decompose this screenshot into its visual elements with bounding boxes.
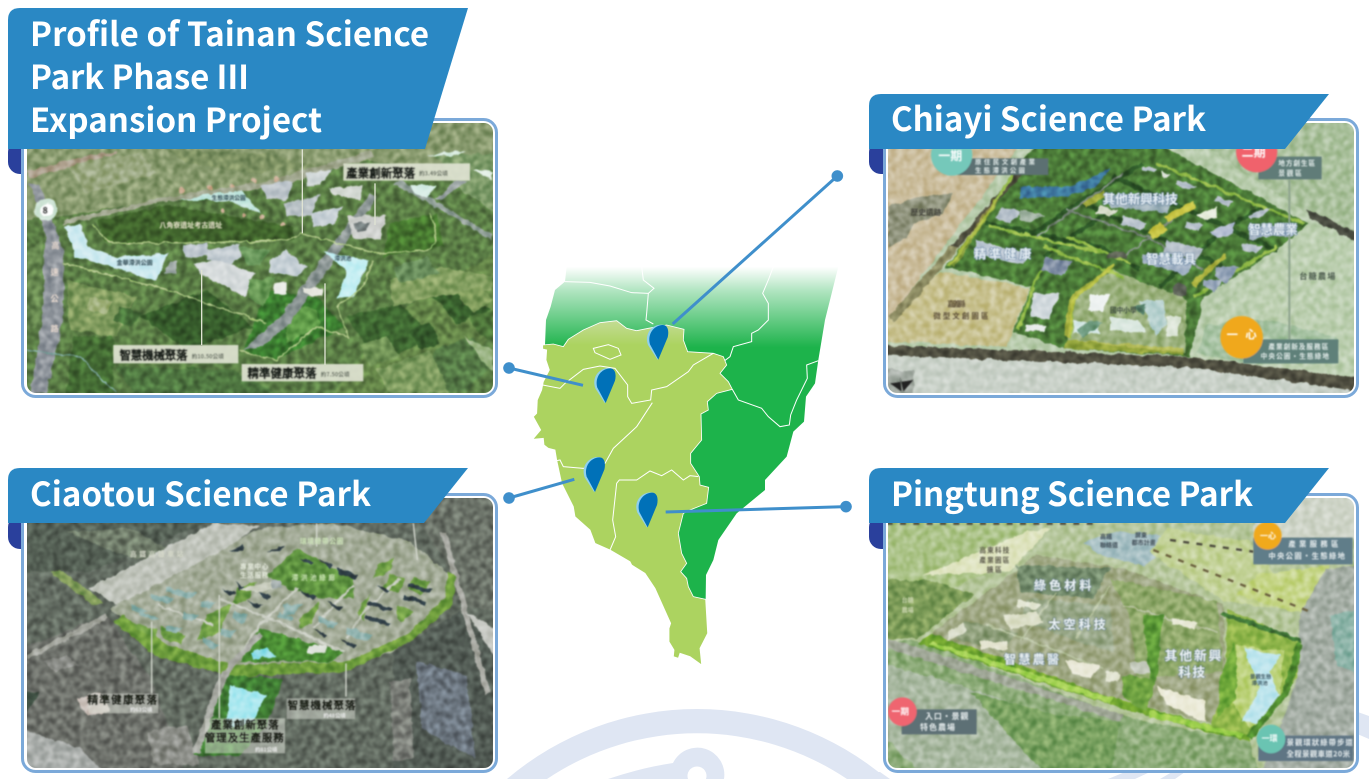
- district labels: 全程景觀車道20米: [1287, 749, 1351, 760]
- heading: Ciaotou Science Park: [8, 468, 468, 523]
- connector: Ciaotou: [503, 479, 574, 504]
- cluster labels: 產業創新聚落: [346, 164, 416, 181]
- icon: pin Tainan: [594, 368, 616, 403]
- district labels: 原住民文創產業: [975, 157, 1035, 166]
- cluster labels: 專業中心: [240, 561, 269, 571]
- panel: Chiayi Science Park map: [869, 110, 1369, 405]
- district labels: 入口・景觀: [925, 711, 968, 722]
- accent tab: [8, 515, 42, 549]
- accent tab: [869, 140, 903, 174]
- district labels: 一心: [1227, 326, 1257, 342]
- district labels: 景觀生態: [1250, 672, 1272, 680]
- label pointer lines: [202, 149, 375, 365]
- county boundaries: [565, 267, 818, 427]
- cluster labels: 公: [51, 294, 59, 305]
- district labels: 綠色材料: [1034, 576, 1091, 593]
- district labels: 擴區: [987, 564, 1002, 574]
- district labels: 屏東: [1135, 530, 1147, 539]
- background watermark: [507, 709, 1369, 779]
- aerial rendering: [27, 123, 493, 393]
- callout circles and tags: [888, 522, 1353, 761]
- frame: [22, 120, 496, 396]
- district labels: 農場: [902, 605, 914, 614]
- connector: Chiayi: [673, 170, 843, 324]
- district labels: 高鐵: [1100, 532, 1112, 541]
- connector: Tainan: [503, 362, 583, 385]
- cluster labels: 約48公頃: [323, 711, 346, 719]
- district labels: 中央公園・生態綠地: [1261, 351, 1329, 361]
- aerial rendering: [888, 123, 1354, 393]
- cluster labels: 八角寮遺址考古遺址: [159, 220, 222, 230]
- district labels: 微型文創園區: [933, 310, 989, 321]
- panel: Tainan Science Park Phase III map: [8, 113, 507, 407]
- heading: Tainan Science Park Phase III: Expansion Project: [30, 94, 322, 142]
- district labels: 生態滯洪公園: [975, 165, 1025, 174]
- district labels: 台糖農場: [1299, 271, 1335, 282]
- district labels: 智慧載具: [1146, 249, 1196, 267]
- accent tab: [8, 140, 42, 174]
- district labels: 二期: [1242, 144, 1266, 161]
- callout circles and tags: [890, 131, 1338, 392]
- cluster labels: 精準健康聚落: [247, 365, 317, 382]
- icon: pin Pingtung: [636, 492, 658, 528]
- map of southern Taiwan: [503, 170, 852, 665]
- district labels: 智慧農業: [1248, 220, 1298, 238]
- cluster labels: 高: [51, 240, 59, 251]
- district labels: 一期: [892, 705, 909, 717]
- cluster labels: 環境綠帶公園: [300, 535, 344, 545]
- frame: [884, 494, 1358, 772]
- district labels: 景觀區: [1278, 167, 1302, 177]
- cluster labels: [43, 163, 470, 382]
- district labels: 滯洪池: [1252, 679, 1268, 687]
- district labels: 中央公園・生態綠地: [1268, 550, 1346, 561]
- frame: [22, 494, 496, 772]
- cluster labels: 滯洪池: [334, 254, 352, 263]
- cluster labels: [87, 535, 356, 754]
- district labels: 嘉義縣: [947, 299, 966, 310]
- heading: Chiayi Science Park: Chiayi Science Park: [891, 93, 1206, 141]
- district labels: 都市計畫: [1132, 538, 1156, 547]
- district labels: 其他新興科技: [1103, 188, 1178, 207]
- district labels: 特色農場: [920, 722, 955, 733]
- district labels: 產業園區: [979, 554, 1010, 564]
- cluster labels: 產業創新聚落: [211, 716, 279, 732]
- cluster labels: 路: [51, 324, 59, 335]
- cluster labels: 智慧機械聚落: [287, 697, 356, 713]
- label pointer lines: [152, 523, 417, 718]
- cluster labels: 金華滯洪公園: [117, 258, 153, 267]
- cluster labels: 約63公頃: [130, 706, 153, 714]
- heading: Tainan Science Park Phase III: Park Phase III: [30, 51, 249, 99]
- cluster labels: 約10.50公頃: [192, 351, 224, 360]
- terrain texture: [27, 498, 493, 768]
- cluster labels: 速: [51, 267, 59, 278]
- cluster labels: 智慧機械聚落: [119, 346, 188, 363]
- district labels: 精準健康: [974, 244, 1031, 262]
- district labels: 一環: [1262, 733, 1278, 744]
- panel: Pingtung Science Park map: [869, 488, 1369, 779]
- heading: Tainan Science Park Phase III: [8, 8, 468, 149]
- district labels: [911, 144, 1335, 361]
- district labels: 太空科技: [1048, 615, 1106, 632]
- heading: Ciaotou Science Park: Ciaotou Science Park: [30, 468, 371, 516]
- eastern counties: [545, 267, 838, 599]
- icon: pin Chiayi: [647, 325, 668, 360]
- cluster labels: 約81公頃: [255, 746, 278, 754]
- district labels: 其他新興: [1165, 645, 1222, 664]
- district labels: 台糖: [902, 595, 914, 604]
- cluster labels: 滯洪池綠廊: [292, 572, 335, 582]
- district labels: 高東科技: [979, 544, 1010, 554]
- aerial rendering: [888, 498, 1354, 768]
- district labels: [892, 530, 1353, 760]
- district labels: 一期: [938, 147, 962, 164]
- heading: Pingtung Science Park: Pingtung Science Park: [891, 468, 1253, 516]
- western counties: [533, 321, 732, 665]
- cluster labels: 生態滯洪公園: [212, 193, 246, 202]
- accent tab: [869, 515, 903, 549]
- district labels: 科技: [1178, 661, 1205, 680]
- cluster labels: 生活服務: [240, 570, 269, 580]
- cluster labels: 8: [43, 204, 48, 216]
- connector: Pingtung: [666, 501, 852, 512]
- cluster labels: 約3.49公頃: [419, 169, 448, 178]
- frame: [884, 120, 1358, 396]
- district labels: 智慧農醫: [1004, 650, 1059, 667]
- rail line: [887, 524, 1310, 612]
- cluster labels: 精準健康聚落: [87, 692, 157, 708]
- district labels: 產業創新及服務區: [1268, 341, 1329, 351]
- heading: Tainan Science Park Phase III: Profile of Tainan Science: [30, 8, 429, 56]
- icon: pin Ciaotou: [584, 457, 605, 492]
- cluster labels: 約7.50公頃: [321, 370, 350, 379]
- aerial rendering: [27, 498, 493, 768]
- district labels: 聯絡道: [1100, 541, 1118, 550]
- vegetation texture: [888, 498, 1354, 768]
- cluster labels: 管理及生產服務: [205, 730, 284, 746]
- inner boundaries: [543, 345, 713, 550]
- district labels: 一心: [1260, 530, 1276, 541]
- heading: Pingtung Science Park: [869, 468, 1329, 523]
- vegetation texture: [888, 123, 1354, 393]
- district labels: 歷史遺跡: [911, 207, 942, 218]
- vegetation texture: [27, 123, 493, 393]
- district labels: 景觀環狀綠帶步道: [1287, 737, 1353, 748]
- district labels: 地方創生區: [1278, 157, 1315, 167]
- cluster labels: 高鐵高雄車站: [130, 549, 184, 559]
- district labels: 國中小學: [1110, 305, 1137, 315]
- district labels: 產業服務區: [1288, 539, 1339, 550]
- heading: Chiayi Science Park: [869, 93, 1329, 149]
- panel: Ciaotou Science Park map: [8, 488, 507, 779]
